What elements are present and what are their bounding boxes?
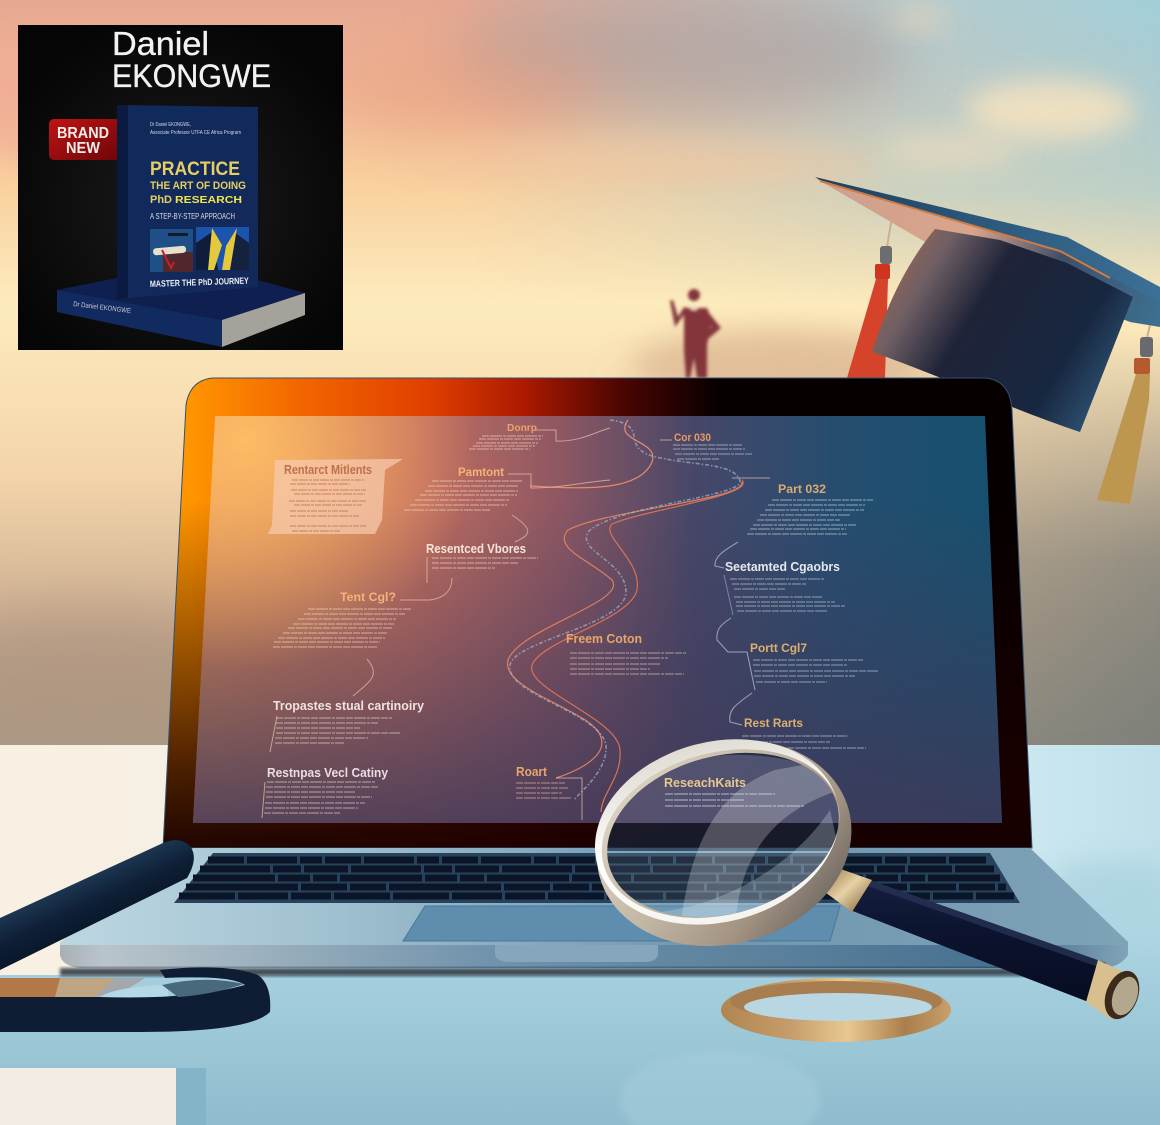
laptop front edge xyxy=(60,945,1128,968)
laptop base deck xyxy=(60,848,1128,950)
red tassel xyxy=(847,217,892,378)
stylus pen xyxy=(0,840,194,970)
screen labels: Restnpas Vecl Catiny xyxy=(267,765,389,780)
screen labels xyxy=(267,423,840,780)
upright book cover: A STEP-BY-STEP APPROACH xyxy=(150,212,235,221)
author name: Daniel xyxy=(112,25,209,62)
book title: THE ART OF DOING xyxy=(150,180,246,192)
book title: RESEARCH xyxy=(175,195,242,206)
upright book cover xyxy=(117,105,258,299)
screen labels: Rest Rarts xyxy=(744,716,803,730)
brand new badge: NEW xyxy=(66,140,101,157)
laptop xyxy=(60,378,1128,976)
cap underside xyxy=(815,178,1160,327)
author name: EKONGWE xyxy=(112,58,271,94)
brand new badge: BRAND xyxy=(57,125,109,142)
cover image: academic gown xyxy=(196,227,249,270)
lower book xyxy=(57,278,305,347)
screen labels: Resentced Vbores xyxy=(426,541,526,556)
lens label: ReseachKaits xyxy=(664,775,746,790)
gold tassel xyxy=(1097,325,1153,504)
magnifying glass xyxy=(595,739,1140,1020)
laptop lid xyxy=(163,378,1032,848)
winding research roadmap xyxy=(507,420,743,812)
screen labels: Pamtont xyxy=(458,465,504,479)
laptop screen xyxy=(193,416,1002,823)
gold ring xyxy=(721,978,951,1042)
screen labels: Tent Cgl? xyxy=(340,590,396,604)
book title xyxy=(150,159,246,206)
dark ring object xyxy=(0,967,270,1032)
screen labels: Freem Coton xyxy=(566,631,642,646)
magnifier lens xyxy=(607,753,838,918)
upright book cover: MASTER THE PhD JOURNEY xyxy=(150,276,249,289)
magnifier handle xyxy=(822,866,1146,1024)
icon: graduation cap xyxy=(815,177,1160,504)
screen labels: Seetamted Cgaobrs xyxy=(725,559,840,574)
laptop notch xyxy=(495,945,658,962)
screen notes box xyxy=(268,459,403,534)
magnifier rim xyxy=(573,711,875,974)
upright book cover: Dr Daniel EKONGWE, xyxy=(150,122,191,128)
screen notes box: Rentarct Mitlents xyxy=(284,462,372,477)
panel: book promotion xyxy=(18,25,343,350)
screen labels: Roart xyxy=(516,764,548,779)
screen labels: Part 032 xyxy=(778,482,826,496)
screen paragraph lines xyxy=(264,436,878,813)
screen labels: Tropastes stual cartinoiry xyxy=(273,698,425,713)
book title: PRACTICE xyxy=(150,159,240,180)
screen labels: Portt Cgl7 xyxy=(750,641,807,655)
screen labels: Cor 030 xyxy=(674,432,711,444)
cap body xyxy=(872,229,1133,432)
cover image: diploma xyxy=(150,229,193,272)
connector lines xyxy=(262,428,770,820)
author name xyxy=(112,25,271,94)
lower book: Dr Daniel EKONGWE xyxy=(73,301,131,315)
sky background xyxy=(0,0,1160,760)
silhouette figure on the horizon xyxy=(670,289,721,378)
trackpad xyxy=(403,906,840,941)
brand new badge xyxy=(49,119,121,160)
screen labels: Donrp xyxy=(507,423,537,434)
upright book cover: Associate Professor UTFA CE Africa Program xyxy=(150,130,241,136)
book title: PhD xyxy=(150,194,172,206)
table surface xyxy=(0,745,1160,1125)
cap mortarboard xyxy=(815,177,1160,302)
keyboard xyxy=(174,853,1020,903)
